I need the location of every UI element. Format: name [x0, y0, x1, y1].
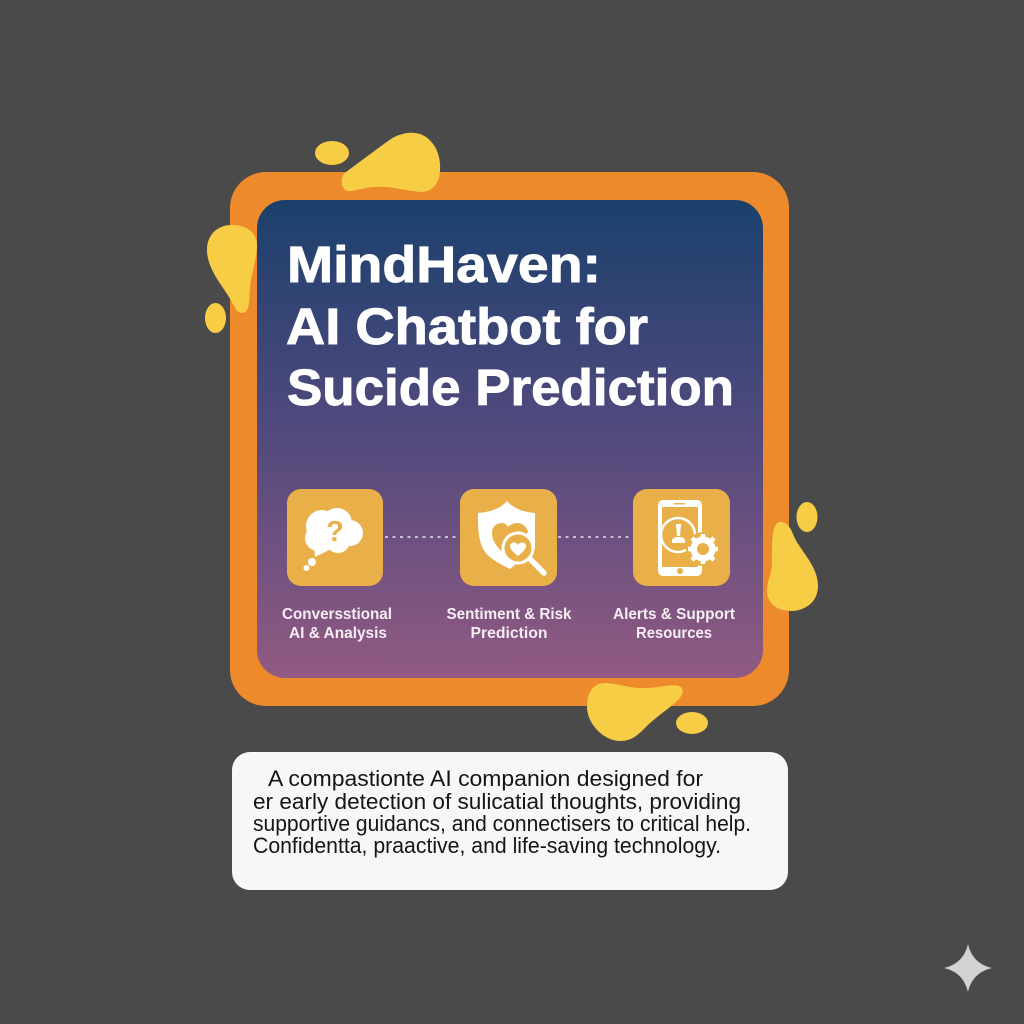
- description text: supportive guidancs, and connectisers to critical help.: [253, 811, 751, 836]
- label: conversational AI: Conversstional: [282, 606, 392, 623]
- label: conversational AI: [282, 606, 392, 642]
- title: MindHaven:: [287, 236, 601, 293]
- panel: gradient main card: [257, 200, 763, 678]
- decorative yellow blobs: [205, 133, 818, 741]
- title: AI Chatbot for: [286, 298, 648, 355]
- title: Sucide Prediction: [287, 359, 734, 416]
- description text: [253, 766, 751, 858]
- description text: Confidentta, praactive, and life-saving technology.: [253, 833, 721, 858]
- label: alerts and support: Alerts & Support: [613, 606, 735, 623]
- icon: thought bubble with question mark: [287, 489, 383, 586]
- label: alerts and support: Resources: [636, 625, 712, 642]
- description text: er early detection of sulicatial thoughts, providing: [253, 789, 741, 814]
- label: alerts and support: [613, 606, 735, 642]
- label: sentiment and risk: [446, 606, 572, 642]
- icon: sparkle star: [944, 944, 992, 992]
- icon: thought bubble with question mark: ?: [326, 516, 344, 548]
- label: sentiment and risk: Sentiment & Risk: [446, 606, 572, 623]
- label: sentiment and risk: Prediction: [470, 625, 548, 642]
- dotted connectors: [385, 536, 633, 538]
- panel: orange frame: [230, 172, 789, 706]
- panel: description card: [232, 752, 788, 890]
- icon: shield, heart and magnifier: [460, 489, 557, 586]
- title: [286, 236, 734, 416]
- icon: phone with alert and gear: [633, 489, 730, 586]
- description text: A compastionte AI companion designed for: [268, 766, 703, 791]
- label: conversational AI: AI & Analysis: [289, 625, 387, 642]
